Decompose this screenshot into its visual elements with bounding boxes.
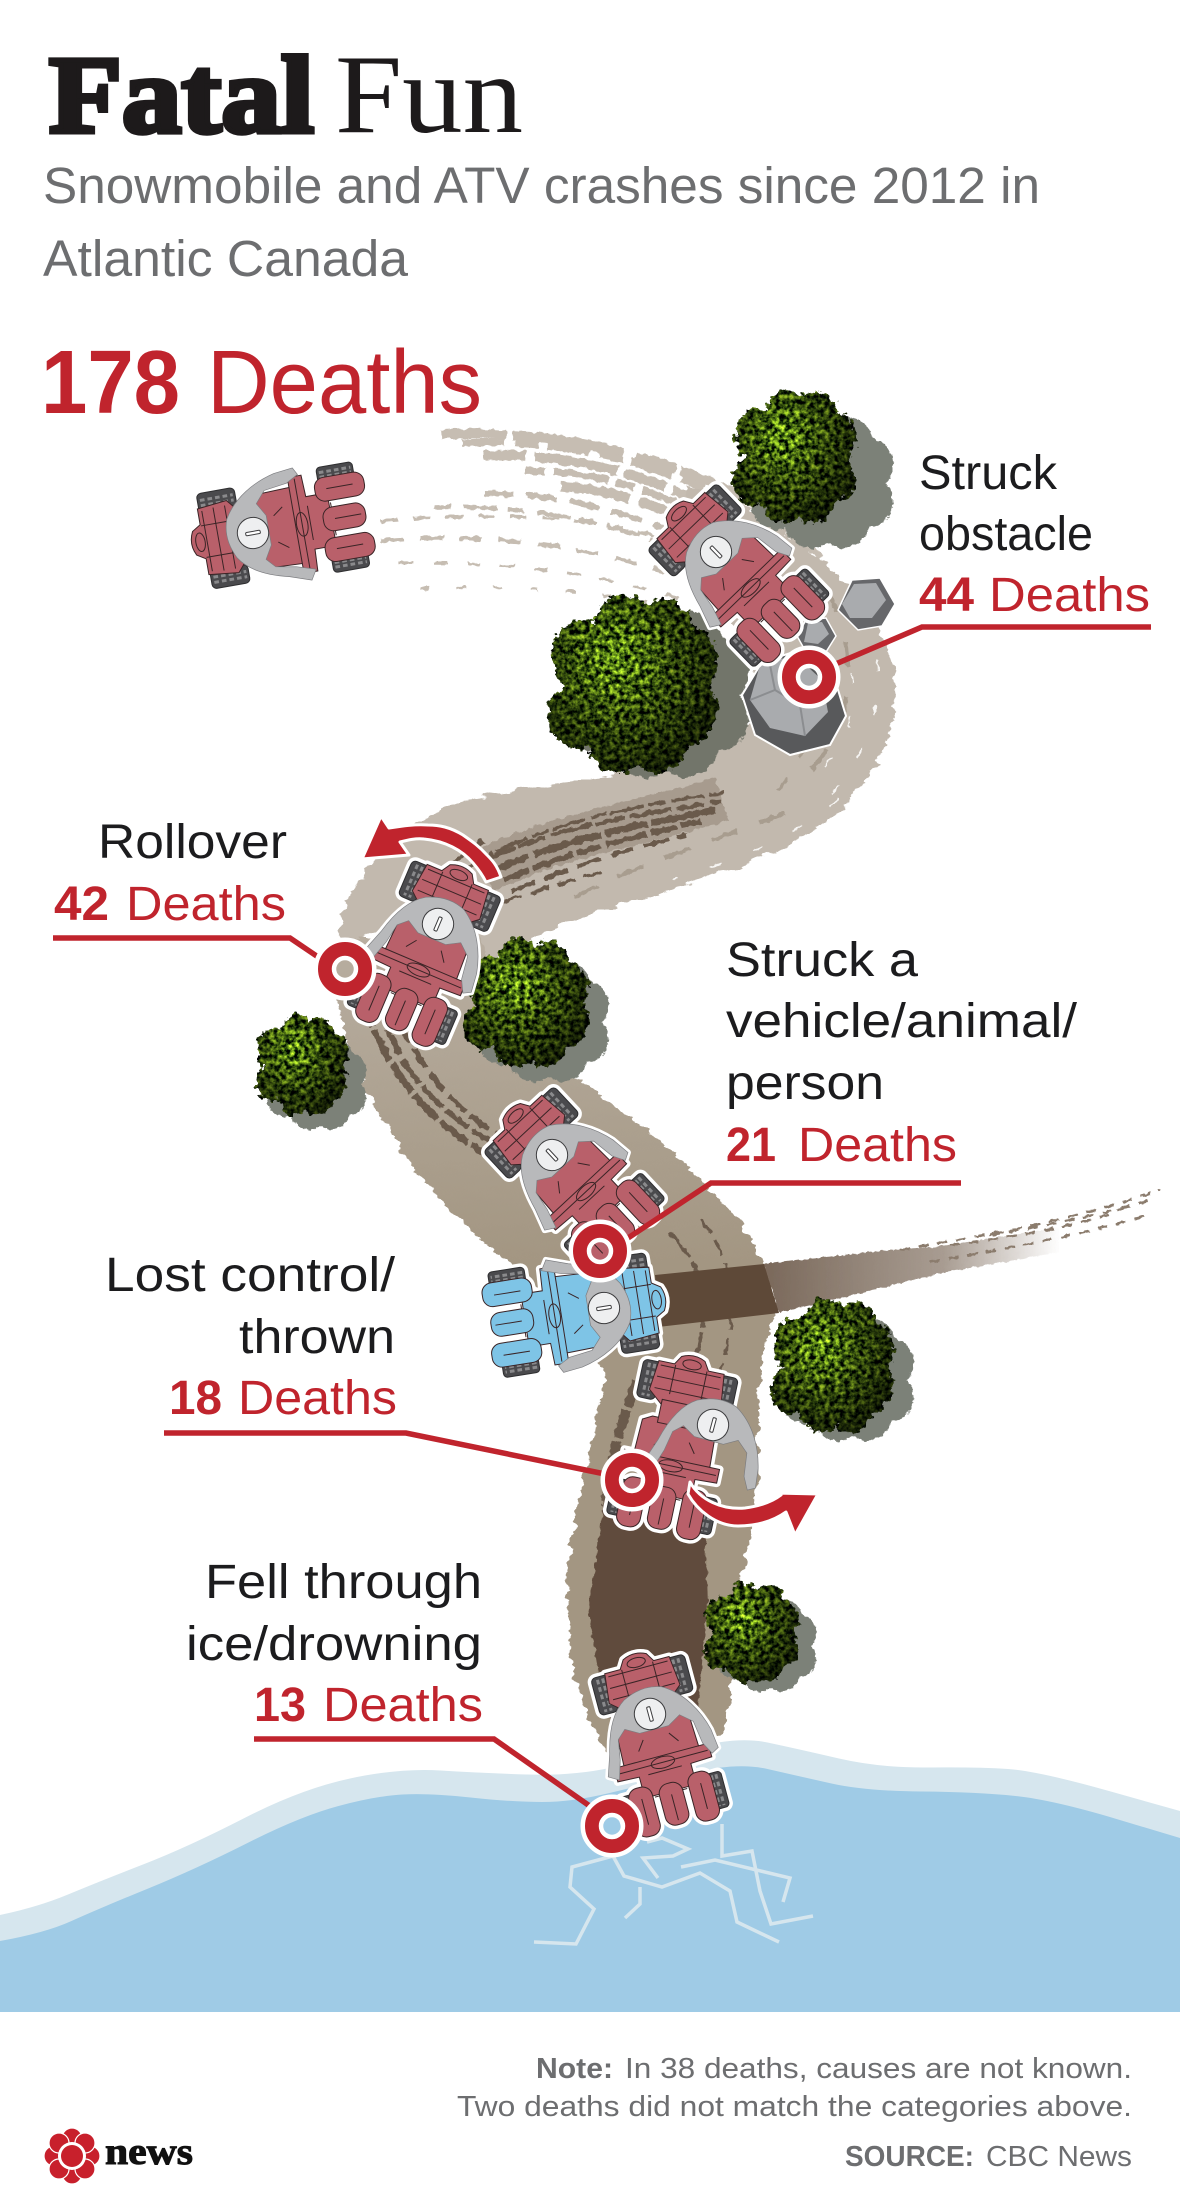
label: lost control/thrown: 18: [169, 1372, 222, 1425]
label: rollover: Deaths: [126, 878, 286, 931]
marker: struck vehicle: [571, 1222, 629, 1280]
label: struck a vehicle/animal/person: 21: [726, 1119, 776, 1172]
label: fell through ice/drowning: 13: [254, 1679, 306, 1732]
label: fell through ice/drowning: Fell through: [205, 1556, 482, 1609]
label: lost control/thrown: Deaths: [238, 1372, 397, 1425]
dark streaks: [420, 792, 729, 911]
subtitle: [43, 157, 1040, 287]
top streaks: [381, 434, 855, 631]
vehicle: rollover: [340, 845, 515, 1055]
label: lost control/thrown: thrown: [239, 1311, 395, 1364]
leader lines: [53, 627, 1151, 1809]
vehicle: struck a vehicle: [468, 1070, 675, 1280]
label: lost control/thrown: [105, 1249, 397, 1425]
arrow: rollover: [362, 816, 501, 882]
label: struck obstacle: obstacle: [919, 508, 1093, 561]
tree 5: [771, 1299, 914, 1441]
small boulder: [797, 618, 836, 652]
tree 2: [548, 595, 749, 778]
vehicle: escaping ATV at top: [182, 456, 379, 600]
brush gaps: [673, 617, 878, 880]
CBC news logo: news: [105, 2131, 193, 2173]
label: lost control/thrown: Lost control/: [105, 1249, 396, 1302]
subtitle: Atlantic Canada: [43, 230, 409, 287]
tree 1: [733, 390, 893, 548]
band texture: [575, 589, 848, 897]
label: struck a vehicle/animal/person: vehicle/animal/: [726, 995, 1078, 1048]
side skid streak: [655, 1190, 1160, 1327]
label: struck a vehicle/animal/person: [726, 934, 1078, 1172]
curve band: [336, 483, 896, 960]
label: struck a vehicle/animal/person: Deaths: [798, 1119, 957, 1172]
note: Note:: [536, 2053, 613, 2085]
marker: struck obstacle: [780, 648, 838, 706]
water and ice: [0, 1740, 1180, 2012]
source: [845, 2141, 1132, 2173]
label: fell through ice/drowning: [186, 1556, 483, 1732]
main road: [334, 939, 774, 1752]
title: Fatal: [49, 34, 314, 156]
total deaths heading: 178: [41, 333, 180, 433]
marker: rollover: [316, 940, 374, 998]
trail: skid marks: [334, 434, 896, 1752]
medium boulder: [838, 578, 895, 630]
vehicle: blue ATV: [478, 1242, 674, 1383]
ice cracks: [534, 1824, 813, 1944]
vehicle: lost control: [604, 1345, 775, 1544]
label: fell through ice/drowning: ice/drowning: [186, 1618, 482, 1671]
marker: lost control: [603, 1451, 661, 1509]
tree 4: [256, 1015, 366, 1130]
label: struck obstacle: Struck: [919, 447, 1058, 500]
vehicle: fell through ice: [579, 1639, 736, 1843]
arrow: lost control: [688, 1482, 818, 1535]
title: Fun: [335, 33, 523, 157]
label: struck a vehicle/animal/person: Struck a: [726, 934, 918, 987]
big boulder: [742, 650, 846, 755]
total deaths heading: [41, 333, 482, 433]
subtitle: Snowmobile and ATV crashes since 2012 in: [43, 157, 1040, 214]
label: rollover: 42: [54, 878, 109, 931]
label: struck obstacle: [919, 447, 1150, 622]
source: SOURCE:: [845, 2141, 974, 2173]
label: struck a vehicle/animal/person: person: [726, 1057, 884, 1110]
note: [457, 2053, 1132, 2123]
tree 6: [704, 1583, 816, 1692]
note: In 38 deaths, causes are not known.: [625, 2053, 1132, 2085]
title: [49, 33, 523, 157]
vehicle: struck obstacle: [632, 467, 839, 676]
note: Two deaths did not match the categories above.: [457, 2091, 1132, 2123]
marker: fell through ice: [583, 1797, 641, 1855]
label: struck obstacle: Deaths: [989, 569, 1150, 622]
label: fell through ice/drowning: Deaths: [323, 1679, 483, 1732]
total deaths heading: Deaths: [207, 333, 482, 433]
label: rollover: Rollover: [98, 816, 287, 869]
label: rollover: [54, 816, 287, 931]
dark road centre: [589, 1492, 708, 1727]
CBC news logo: [44, 2128, 193, 2184]
tree 3: [464, 938, 609, 1082]
label: struck obstacle: 44: [919, 569, 974, 622]
source: CBC News: [986, 2141, 1132, 2173]
